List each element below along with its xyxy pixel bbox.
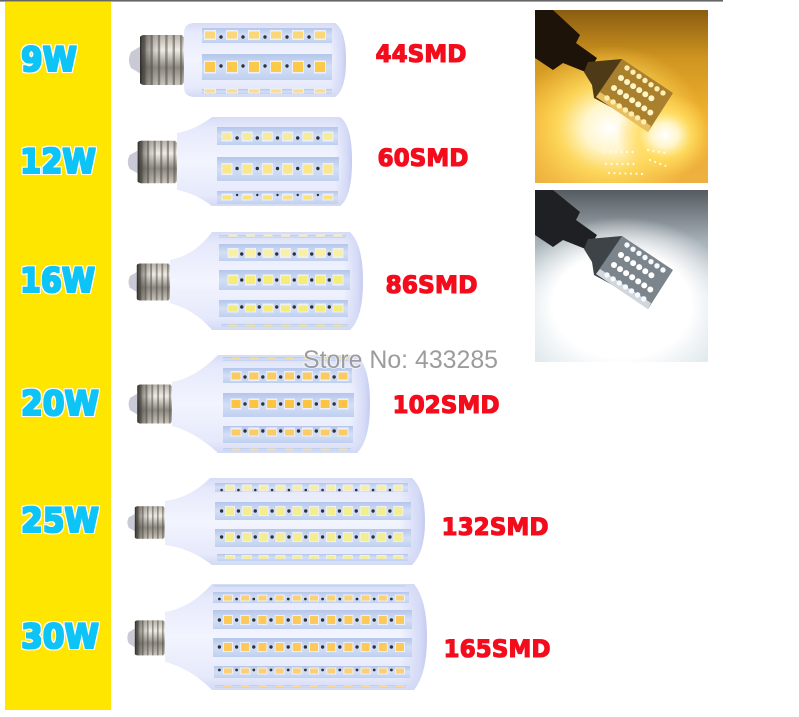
- photo: cool white bulb lit: [535, 190, 708, 362]
- bulb: 20W: [129, 355, 370, 453]
- label 44SMD: 44SMD: [376, 40, 466, 68]
- hand holding bulb: [535, 190, 597, 250]
- label 165SMD: 165SMD: [444, 635, 550, 663]
- bulb: 25W: [127, 478, 425, 565]
- label 60SMD: 60SMD: [378, 144, 468, 172]
- bulb neck and body: [584, 59, 624, 108]
- store number watermark: Store No: 433285: [303, 346, 498, 374]
- label 132SMD: 132SMD: [442, 513, 548, 541]
- bulb: 16W: [129, 232, 363, 330]
- wattage label 9W: 9W: [21, 40, 77, 80]
- wattage label 20W: 20W: [21, 384, 99, 424]
- wattage label 12W: 12W: [20, 142, 96, 182]
- wattage label 16W: 16W: [20, 261, 95, 301]
- bulb: 12W: [128, 117, 352, 206]
- photo: warm white bulb lit: [535, 10, 708, 183]
- label 102SMD: 102SMD: [392, 391, 500, 419]
- panel: yellow wattage column: [5, 2, 111, 710]
- bulb: 9W: [129, 23, 346, 97]
- reflected LED dots: [605, 150, 666, 174]
- wattage label 30W: 30W: [21, 617, 99, 657]
- hand holding bulb: [535, 10, 597, 73]
- bulb neck and body: [584, 236, 624, 286]
- wattage label 25W: 25W: [21, 501, 99, 541]
- bulb: 30W: [127, 584, 427, 690]
- label 86SMD: 86SMD: [386, 271, 478, 299]
